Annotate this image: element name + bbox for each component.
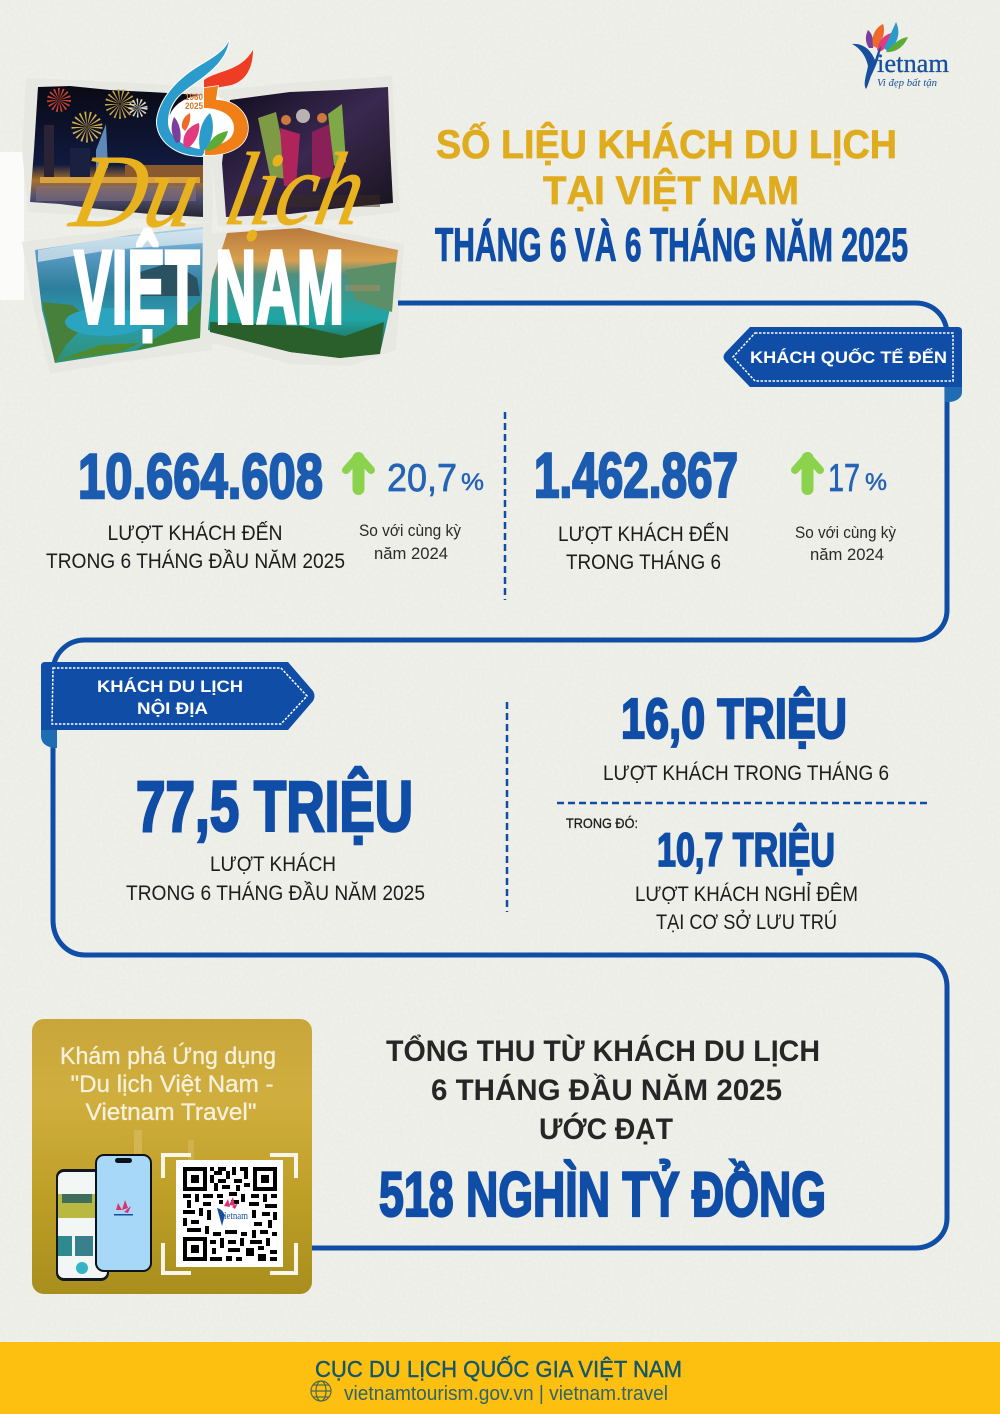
stat: six months: năm 2024 (374, 544, 448, 563)
photo: stage performers (212, 76, 400, 226)
tag: domestic visitors (41, 662, 314, 748)
lotus mark (866, 22, 908, 52)
caption: LƯỢT KHÁCH TRONG THÁNG 6 (603, 762, 889, 785)
white paper patch (0, 152, 24, 300)
stat: six months (46, 442, 484, 573)
icon: globe (311, 1381, 331, 1401)
icon: up arrow (795, 456, 820, 489)
revenue heading: TỔNG THU TỪ KHÁCH DU LỊCH (386, 1034, 820, 1068)
revenue heading (386, 1034, 820, 1146)
scan corners (163, 1155, 296, 1273)
photo: bay with karst islands (22, 222, 212, 374)
stat: 77.5 million (126, 767, 425, 905)
number: 1.462.867 (534, 441, 738, 511)
number 6 swoosh (157, 40, 229, 156)
script title: Du lịch: Du (61, 133, 210, 249)
caption: LƯỢT KHÁCH ĐẾN (108, 522, 282, 545)
QR centre logo: ietnam (224, 1210, 248, 1222)
app heading: Khám phá Ứng dụng (60, 1043, 276, 1070)
QR modules (183, 1167, 277, 1261)
app heading: Vietnam Travel" (86, 1099, 256, 1126)
footer band (0, 1342, 1000, 1414)
ribbon fold (41, 728, 57, 748)
caption: LƯỢT KHÁCH (210, 853, 336, 876)
revenue heading: ƯỚC ĐẠT (539, 1112, 673, 1146)
stat: June: năm 2024 (810, 545, 884, 564)
collage title: VIỆT NAM: VIỆT NAM (74, 230, 344, 346)
script title: Du lịch: lịch (217, 131, 376, 247)
connecting frame line (53, 303, 947, 1248)
number 5 bowl (204, 86, 248, 155)
footer background (0, 1342, 1000, 1414)
section: international visitors stats (46, 441, 896, 574)
photo collage (22, 76, 404, 374)
QR background (176, 1160, 283, 1267)
logo: Vietnam tourism (852, 22, 949, 89)
number: 10,7 TRIỆU (657, 823, 835, 876)
wordmark: ietnam (877, 49, 949, 78)
phone: splash screen (95, 1154, 152, 1272)
logo backing (168, 95, 240, 153)
tag: domestic visitors: NỘI ĐỊA (137, 699, 208, 718)
app heading (60, 1043, 276, 1126)
number: 10.664.608 (78, 442, 323, 512)
number 5 flag (204, 50, 253, 90)
stat: six months: TRONG 6 THÁNG ĐẦU NĂM 2025 (46, 550, 345, 573)
revenue heading: 6 THÁNG ĐẦU NĂM 2025 (431, 1073, 782, 1107)
number: 77,5 TRIỆU (136, 767, 413, 847)
growth value: 17 (828, 457, 860, 500)
stitching (52, 668, 307, 724)
qualifier: TRONG ĐÓ: (566, 815, 638, 831)
anniversary years: 2025 (185, 101, 203, 111)
section: total revenue (379, 1034, 826, 1230)
caption: LƯỢT KHÁCH NGHỈ ĐÊM (635, 883, 858, 906)
tag text: KHÁCH DU LỊCH (97, 677, 243, 696)
stat: June (534, 441, 896, 574)
website links: vietnamtourism.gov.vn | vietnam.travel (344, 1383, 668, 1405)
comparison note: So với cùng kỳ (795, 523, 896, 542)
percent sign: % (865, 469, 887, 496)
growth value: 20,7 (387, 457, 457, 500)
logo: 65 years anniversary (157, 40, 253, 156)
stat: 16 million (603, 686, 889, 785)
ribbon fold (945, 385, 962, 402)
QR finder squares (183, 1167, 277, 1261)
photo: city fireworks (22, 78, 213, 222)
organisation name: CỤC DU LỊCH QUỐC GIA VIỆT NAM (315, 1355, 682, 1382)
ribbon body (41, 662, 314, 730)
ribbon body (724, 327, 962, 387)
card background (32, 1019, 312, 1294)
Y swoosh (852, 44, 881, 89)
QR code (163, 1155, 296, 1273)
main heading (435, 121, 908, 271)
tag text: KHÁCH QUỐC TẾ ĐẾN (750, 347, 947, 367)
anniversary years (185, 92, 203, 111)
lotus petals (172, 113, 228, 151)
stat: 10.7 million: TẠI CƠ SỞ LƯU TRÚ (656, 910, 837, 934)
section: domestic visitors stats (126, 686, 889, 934)
heading line 1: SỐ LIỆU KHÁCH DU LỊCH (436, 121, 897, 167)
panel: app promotion (32, 1019, 312, 1294)
stitching (733, 333, 953, 381)
icon: up arrow (346, 456, 371, 489)
tag: international visitors (724, 327, 962, 402)
caption: LƯỢT KHÁCH ĐẾN (558, 523, 729, 546)
percent sign: % (461, 469, 484, 496)
waterfall backdrop (134, 1130, 194, 1160)
comparison note: So với cùng kỳ (359, 521, 461, 540)
stat: 10.7 million (566, 815, 858, 934)
stat: June: TRONG THÁNG 6 (566, 551, 721, 574)
tagline: Vi đẹp bất tận (877, 78, 937, 89)
script title: Du lịch (61, 131, 376, 249)
phone: home screen (56, 1169, 109, 1281)
revenue figure: 518 NGHÌN TỶ ĐỒNG (379, 1159, 826, 1230)
heading line 2: TẠI VIỆT NAM (543, 167, 799, 213)
number: 16,0 TRIỆU (621, 686, 847, 751)
stat: 77.5 million: TRONG 6 THÁNG ĐẦU NĂM 2025 (126, 882, 425, 905)
photo: coastal town (202, 224, 404, 366)
anniversary years: 1960 (185, 92, 203, 102)
app heading: "Du lịch Việt Nam - (70, 1071, 274, 1098)
